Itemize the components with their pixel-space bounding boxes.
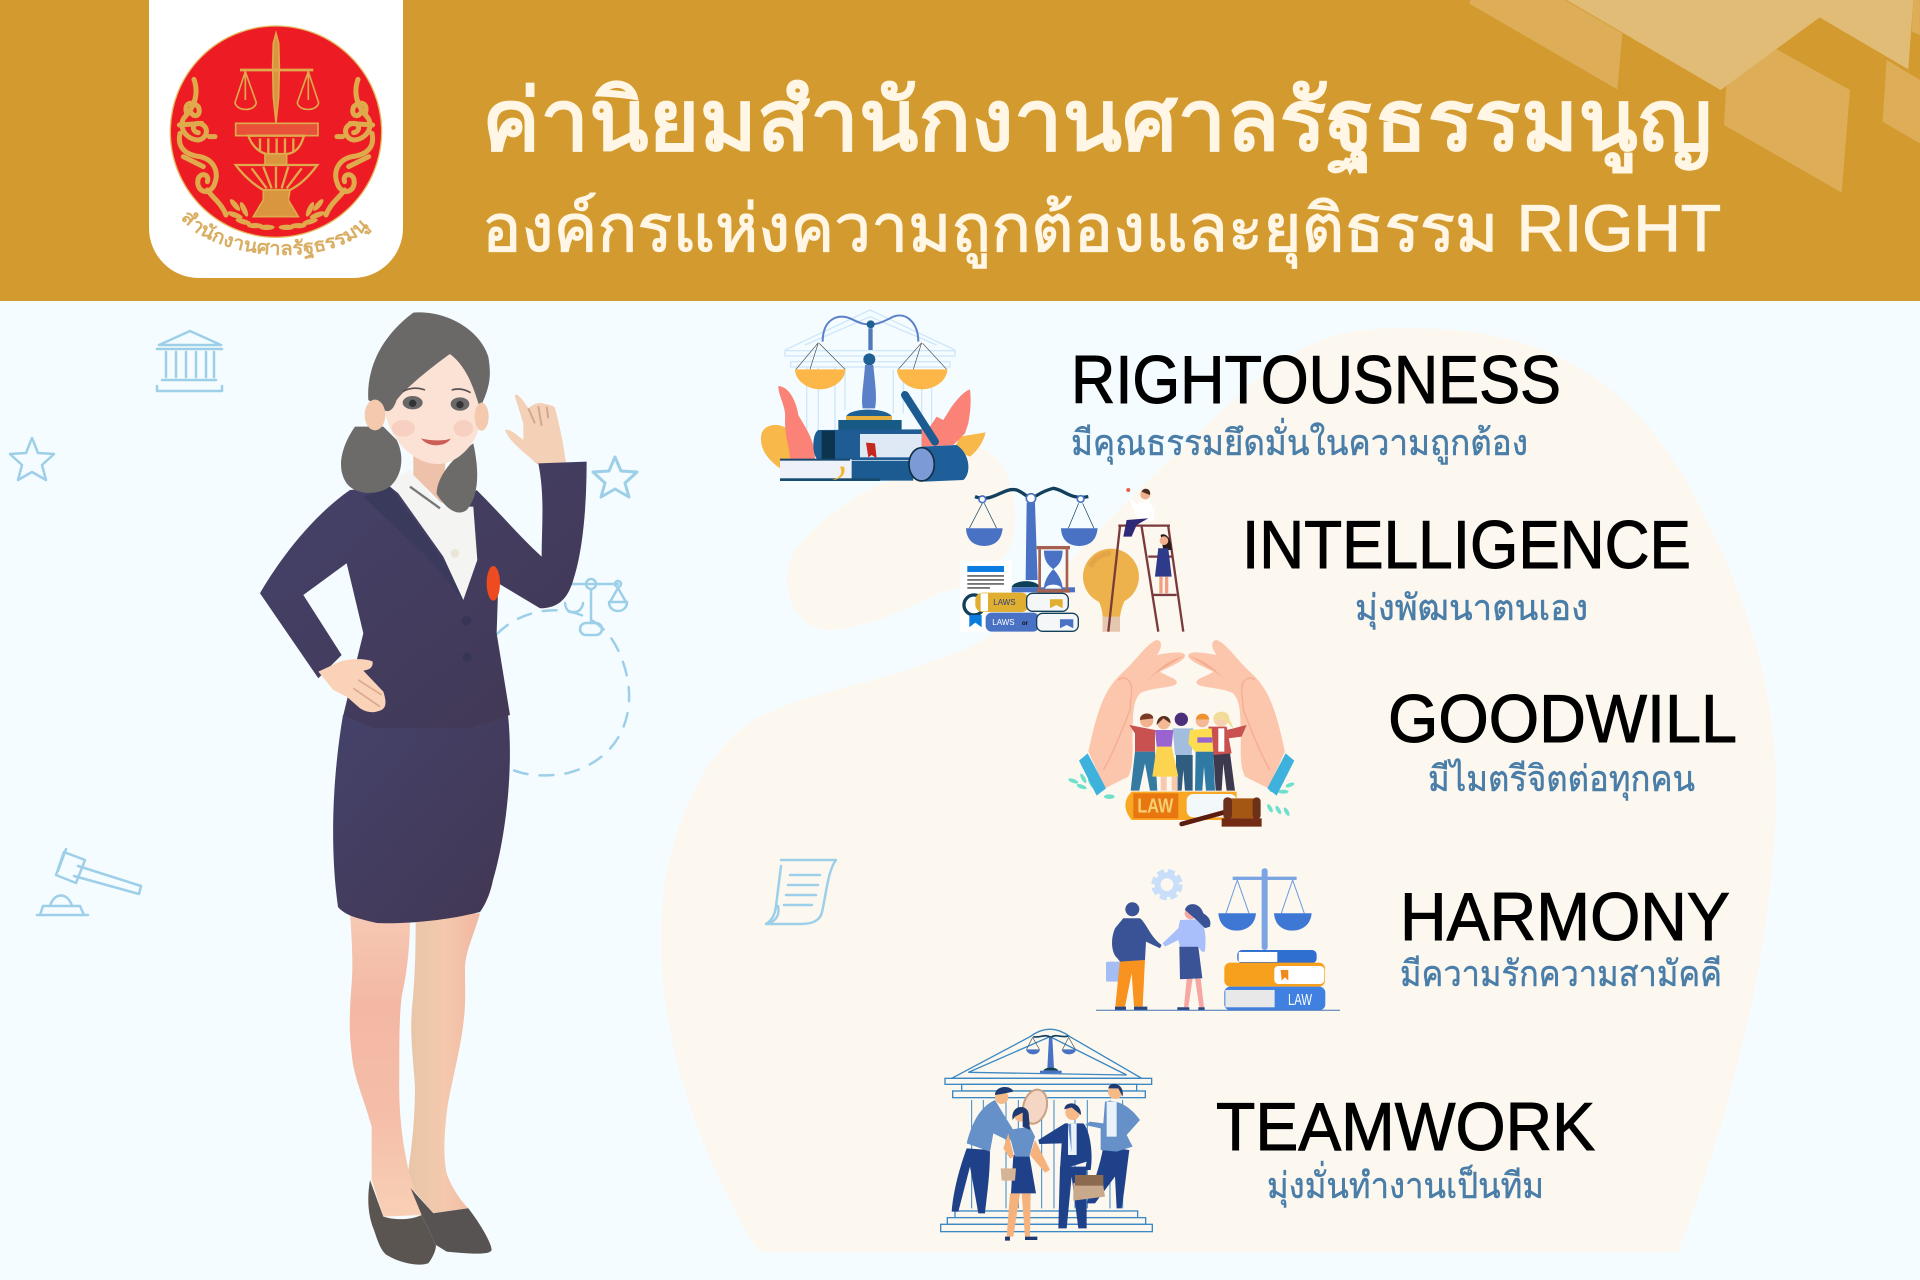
left hand: [1079, 640, 1185, 796]
illustration: intelligence scales, lightbulb and ladder: [960, 488, 1183, 632]
cream background blob: [661, 328, 1776, 1252]
gavel: [905, 395, 968, 482]
dashed circle: [497, 610, 629, 775]
group of people: [1129, 712, 1247, 791]
title line 1: ค่านิยมสำนักงานศาลรัฐธรรมนูญ: [482, 74, 1712, 177]
heading: GOODWILL: [1388, 681, 1737, 757]
badge: [487, 566, 500, 601]
right hand: [1188, 640, 1294, 796]
small scale: [1026, 1036, 1076, 1073]
woman center: [1001, 1107, 1050, 1241]
illustration: rightousness scales and books: [761, 310, 986, 482]
jacket: [260, 462, 587, 728]
heading: TEAMWORK: [1216, 1089, 1595, 1165]
stacked books: [1224, 950, 1325, 1010]
hair top: [368, 312, 490, 411]
mouth: [421, 438, 451, 445]
subtitle: มีคุณธรรมยึดมั่นในความถูกต้อง: [1071, 418, 1528, 465]
value: intelligence: [1242, 507, 1691, 630]
heading: HARMONY: [1400, 879, 1730, 955]
law books: or: [1022, 621, 1029, 627]
hand on hip: [318, 659, 386, 712]
leaves: [1068, 773, 1295, 817]
law books: LAWS: [992, 618, 1015, 627]
document: [960, 561, 1012, 632]
subtitle: มุ่งมั่นทำงานเป็นทีม: [1267, 1161, 1544, 1208]
face: [383, 353, 480, 464]
right shoe: [411, 1188, 492, 1254]
value: rightousness: [1071, 342, 1561, 465]
icon: scales: [560, 579, 627, 635]
subtitle: มีไมตรีจิตต่อทุกคน: [1428, 758, 1695, 801]
subtitle: มีความรักความสามัคคี: [1400, 953, 1722, 994]
illustration: teamwork courthouse: [941, 1029, 1152, 1241]
icon: star right: [593, 457, 637, 497]
eyes: [403, 388, 471, 411]
stacked books: LAW: [1288, 992, 1313, 1009]
skirt: [333, 715, 510, 923]
lapel: [363, 487, 463, 600]
books: [780, 410, 922, 481]
illustration: goodwill hands and people: [1068, 640, 1295, 827]
leaves: [761, 386, 986, 468]
logo emblem: [170, 26, 382, 237]
scale: [966, 488, 1098, 592]
value: teamwork: [1216, 1089, 1595, 1208]
scale: [795, 316, 947, 408]
upper body: [260, 312, 587, 728]
collar line: [410, 487, 440, 508]
cheek blush: [392, 420, 473, 437]
header decorative shapes: [1470, 0, 1920, 193]
icon: courthouse: [157, 331, 222, 391]
heading: RIGHTOUSNESS: [1071, 342, 1561, 418]
raised hand: [505, 394, 566, 464]
woman right: [1085, 1084, 1140, 1208]
icon: star left: [10, 438, 54, 480]
left leg: [350, 913, 422, 1217]
decorative line icons: [10, 331, 836, 924]
buttons: [451, 549, 472, 662]
ground line: [1096, 1009, 1340, 1012]
title line 2: องค์กรแห่งความถูกต้องและยุติธรรม RIGHT: [482, 191, 1721, 269]
neck: [413, 450, 447, 503]
heading: INTELLIGENCE: [1242, 507, 1691, 583]
lightbulb: [1083, 549, 1139, 632]
value: goodwill: [1388, 681, 1737, 801]
left shoe: [368, 1180, 436, 1265]
man left: [952, 1087, 1013, 1213]
woman on ladder: [1155, 534, 1172, 593]
law books: LAWS: [993, 598, 1016, 607]
shirt: [390, 470, 477, 600]
lower hair: [341, 427, 477, 513]
legs and shoes: [350, 913, 492, 1265]
law books: [964, 593, 1078, 632]
courthouse: [941, 1029, 1152, 1232]
icon: scroll: [766, 860, 836, 924]
right leg: [408, 913, 480, 1213]
law book: [1125, 792, 1237, 820]
subtitle: มุ่งพัฒนาตนเอง: [1355, 587, 1588, 630]
illustration: harmony handshake and scale: [1096, 868, 1340, 1010]
logo card: [149, 0, 403, 278]
value: harmony: [1400, 879, 1730, 994]
icon: gavel: [37, 849, 141, 915]
man on ladder: [1123, 488, 1155, 537]
ears: [365, 400, 489, 431]
scale: [1218, 868, 1312, 950]
header band: [0, 0, 1920, 301]
gavel: [1182, 797, 1262, 827]
ladder: [1108, 526, 1183, 632]
woman: [1163, 904, 1210, 1010]
man: [1106, 902, 1162, 1010]
character: woman in suit: [260, 312, 587, 1265]
gear: [1154, 872, 1180, 897]
law book: LAW: [1137, 796, 1173, 818]
suited man: [1038, 1103, 1105, 1228]
hourglass: [1037, 546, 1070, 593]
temple outline: [785, 310, 955, 433]
mirror: [1019, 1087, 1051, 1126]
